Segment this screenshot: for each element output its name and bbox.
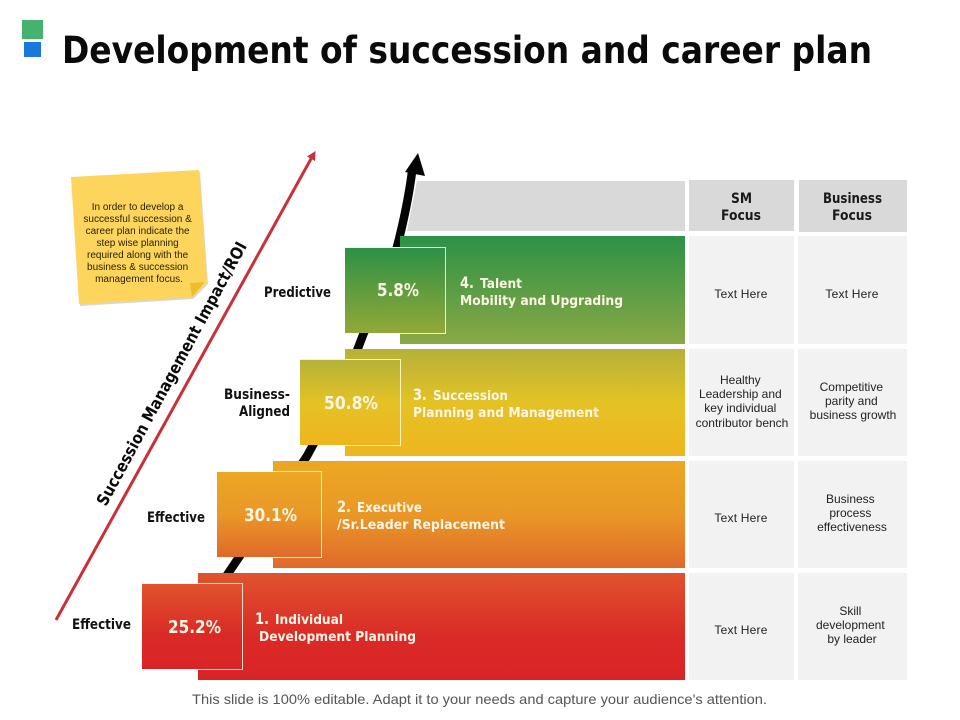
stat box: 30.1%: 30.1% [244, 505, 297, 526]
stat box: 25.2%: 25.2% [168, 617, 221, 638]
step 4 text [460, 273, 623, 309]
header: SM Focus [689, 180, 794, 231]
cell: SM row 3: key individual [704, 401, 776, 415]
step 2 text: Executive [357, 500, 422, 516]
step 1 text: 1. [255, 609, 269, 628]
cell: Business row 3: parity and [825, 394, 878, 408]
cell: Business row 3: Competitive [820, 380, 883, 394]
panel: step 1 individual development [198, 573, 685, 680]
note text: In order to develop a [92, 202, 184, 213]
label: Business-Aligned: Aligned [239, 404, 290, 420]
panel: step 3 succession planning [345, 349, 685, 456]
note text: step wise planning [96, 238, 179, 249]
cell: SM row 3: Leadership and [699, 387, 782, 401]
cell: SM row 3: contributor bench [696, 416, 788, 430]
header: SM Focus: SM [731, 191, 752, 207]
axis label: Succession Management Impact/ROI [93, 239, 251, 509]
cell: Business row 1: Skill [839, 604, 861, 618]
header band [407, 181, 685, 231]
cell: SM row 3: Healthy [720, 373, 761, 387]
step 3 text: Planning and Management [413, 405, 599, 421]
cell: Business row 3: business growth [810, 408, 896, 422]
stat box: 30.1% [217, 472, 322, 558]
step 1 text [255, 609, 416, 645]
stat box: 5.8%: 5.8% [377, 280, 419, 301]
cell: SM row 2: Text Here [714, 511, 768, 525]
stat box: 5.8% [345, 248, 446, 334]
step 3 text: 3. [413, 385, 427, 404]
label: Business-Aligned [224, 387, 290, 420]
cell: SM row 3 [689, 349, 794, 456]
cell: SM row 4 [689, 236, 794, 344]
cell: SM row 4: Text Here [714, 287, 768, 301]
stat box: 50.8% [300, 360, 401, 446]
panel: step 2 executive replacement [273, 461, 685, 568]
step 4 text: Talent [480, 276, 522, 292]
step 1 text: Development Planning [259, 629, 416, 645]
cell: SM row 1 [689, 573, 794, 680]
arrow: red impact axis [56, 151, 316, 620]
stat box: 50.8%: 50.8% [324, 393, 378, 414]
note text: successful succession & [83, 214, 192, 225]
cell: Business row 1 [798, 573, 907, 680]
sticky note [71, 170, 208, 306]
note text: career plan indicate the [86, 226, 190, 237]
header: Business Focus: Business [823, 191, 882, 207]
header: SM Focus: Focus [721, 208, 761, 224]
header: Business Focus [799, 180, 907, 232]
note text: management focus. [95, 274, 183, 285]
cell: SM row 2 [689, 461, 794, 568]
cell: Business row 2 [798, 461, 907, 568]
step 4 text: 4. [460, 273, 474, 292]
cell: SM row 1: Text Here [714, 623, 768, 637]
title: Development of succession and career plan [62, 29, 872, 72]
cell: Business row 2: Business [826, 492, 875, 506]
note text: required along with the [87, 250, 189, 261]
cell: Business row 2: effectiveness [817, 520, 887, 534]
arrow: black growth arrow [225, 153, 425, 578]
cell: Business row 3 [798, 349, 907, 456]
cell: Business row 4: Text Here [825, 287, 879, 301]
footer note: This slide is 100% editable. Adapt it to your needs and capture your audience's attention. [192, 691, 767, 707]
cell: Business row 2: process [829, 506, 871, 520]
label: Effective upper: Effective [147, 510, 205, 526]
label: Effective lower: Effective [72, 617, 131, 633]
cell: Business row 1: by leader [827, 632, 877, 646]
step 2 text: /Sr.Leader Replacement [337, 517, 505, 533]
step 2 text [337, 497, 505, 533]
step 4 text: Mobility and Upgrading [460, 293, 623, 309]
cell: Business row 1: development [816, 618, 885, 632]
header: Business Focus: Focus [832, 208, 872, 224]
step 3 text: Succession [433, 388, 508, 404]
step 2 text: 2. [337, 497, 351, 516]
label: Predictive: Predictive [264, 285, 331, 301]
step 3 text [413, 385, 599, 421]
panel: step 4 talent mobility [400, 236, 685, 344]
icon: logo squares [22, 20, 43, 57]
step 1 text: Individual [275, 612, 343, 628]
stat box: 25.2% [142, 584, 243, 670]
label: Business-Aligned: Business- [224, 387, 290, 403]
note text: business & succession [87, 262, 188, 273]
cell: Business row 4 [798, 236, 907, 344]
